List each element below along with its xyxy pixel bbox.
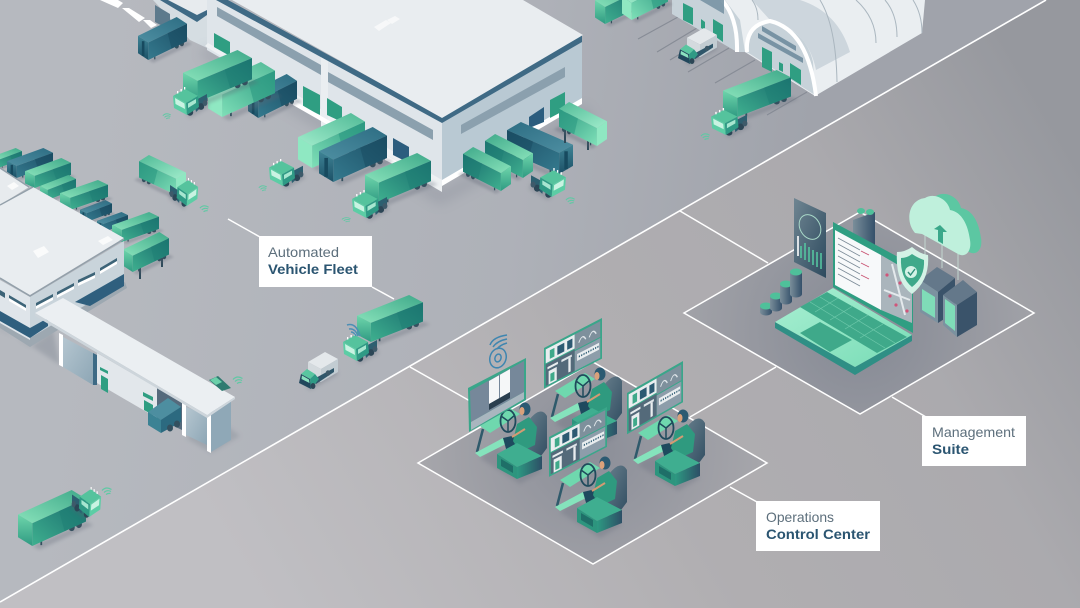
- docked trailers row 2: [298, 113, 438, 221]
- icon: wireless disc: [487, 335, 509, 370]
- lone tractor: [269, 159, 305, 189]
- white truck at hangar: [678, 28, 717, 65]
- label: operations control center: [756, 501, 880, 551]
- white truck on road: [299, 352, 338, 390]
- truck in yard: [134, 155, 198, 209]
- connector lines: [228, 211, 926, 502]
- station 2: [544, 318, 622, 449]
- operations stations: [468, 318, 705, 538]
- hangars: [672, 0, 925, 96]
- label: management suite: Management: [932, 424, 1015, 440]
- central truck: [343, 295, 430, 364]
- small building top left: [100, 0, 207, 48]
- wifi icon: [233, 377, 242, 384]
- label: management suite: [922, 416, 1026, 466]
- data cylinders: [760, 268, 802, 316]
- towers: [853, 208, 875, 245]
- parking lines: [638, 17, 807, 115]
- station 1: [468, 358, 547, 484]
- trailer top left: [138, 17, 192, 63]
- wifi icon: [701, 134, 710, 140]
- bottom left truck: [18, 487, 101, 550]
- security shield: [897, 247, 928, 294]
- station 4: [549, 407, 627, 538]
- label: operations control center: Operations: [766, 509, 834, 525]
- main warehouse: [200, 0, 595, 205]
- cloud: [909, 194, 981, 280]
- hidden tractor behind canopy: [209, 376, 231, 391]
- label: automated vehicle fleet: [259, 236, 372, 287]
- label: automated vehicle fleet: Vehicle Fleet: [268, 261, 358, 277]
- left building trailers: [0, 148, 174, 279]
- management suite: [760, 194, 981, 375]
- wifi icons: [163, 114, 575, 222]
- loading canopy: [35, 298, 240, 453]
- wifi icon: blue: [347, 324, 360, 336]
- dashboard panel: [794, 198, 826, 278]
- label: operations control center: Control Center: [766, 526, 871, 542]
- left building: [0, 168, 127, 365]
- docked trailers right side: [458, 102, 607, 200]
- server racks: [920, 267, 977, 337]
- platform: operations: [418, 362, 767, 564]
- station 3: [627, 361, 705, 491]
- wifi icon: [102, 488, 112, 494]
- label: management suite: Suite: [932, 441, 969, 457]
- docked trailers row 1: [173, 50, 302, 121]
- truck at hangar: [711, 70, 798, 138]
- label: automated vehicle fleet: Automated: [268, 244, 339, 260]
- platform: management: [684, 212, 1034, 414]
- laptop: [775, 222, 913, 375]
- trailers top centre: [595, 0, 673, 27]
